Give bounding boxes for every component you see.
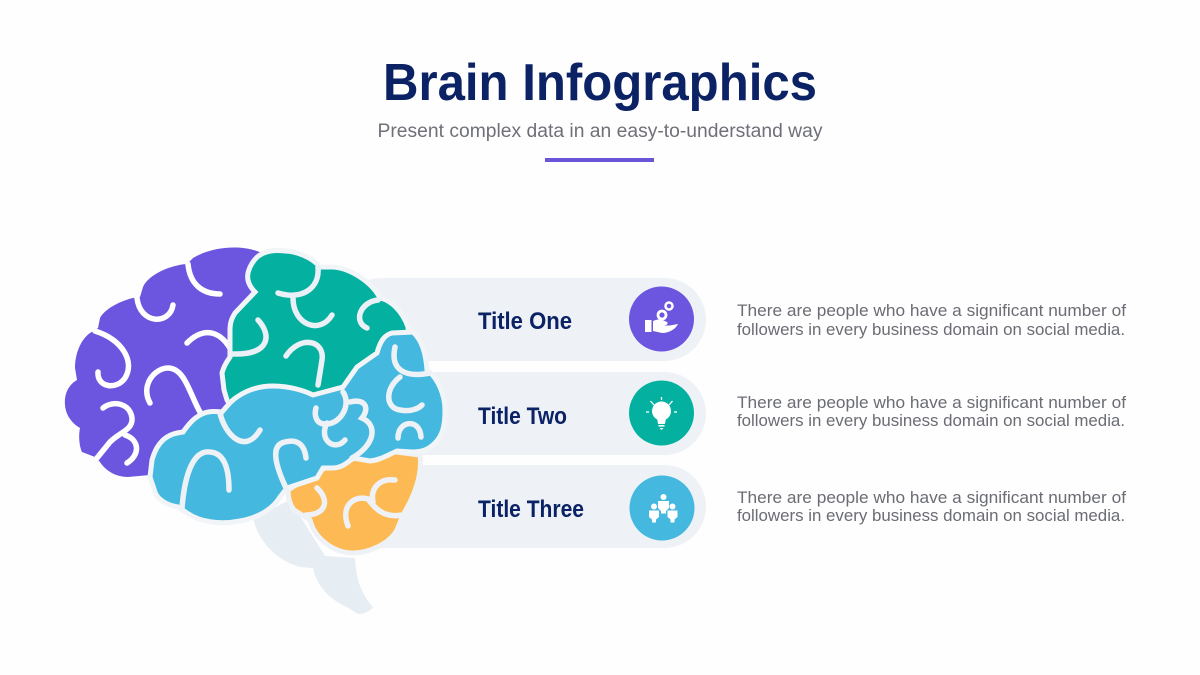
panel: title two pill [340, 372, 706, 455]
illustration: brain [65, 248, 445, 614]
panel: title three pill [340, 465, 706, 548]
icon: light bulb [629, 380, 694, 446]
text block: description two: followers in every business domain on social media. [737, 412, 1125, 430]
lobe: blue [150, 332, 445, 523]
text block: description three: followers in every business domain on social media. [737, 507, 1125, 525]
panel: title one pill [340, 278, 706, 361]
text block: description three [737, 489, 1126, 525]
label: title two: Title Two [478, 403, 567, 430]
icon: hand with coins [629, 286, 694, 352]
text block: description one [737, 302, 1126, 339]
subtitle: Present complex data in an easy-to-understand way [378, 121, 823, 142]
text block: description one: There are people who have a significant number of [737, 302, 1126, 320]
icon: people group [630, 476, 694, 540]
label: title three: Title Three [478, 496, 584, 523]
brain stem [253, 500, 373, 614]
text block: description two: There are people who have a significant number of [737, 394, 1126, 412]
lobe: teal [222, 250, 410, 405]
text block: description three: There are people who have a significant number of [737, 489, 1126, 507]
lobe: orange [288, 450, 420, 553]
text block: description two [737, 394, 1126, 430]
title underline [545, 158, 654, 162]
label: title one: Title One [478, 308, 572, 335]
text block: description one: followers in every business domain on social media. [737, 321, 1125, 339]
lobe: purple [65, 248, 262, 477]
title: Brain Infographics [383, 54, 817, 112]
